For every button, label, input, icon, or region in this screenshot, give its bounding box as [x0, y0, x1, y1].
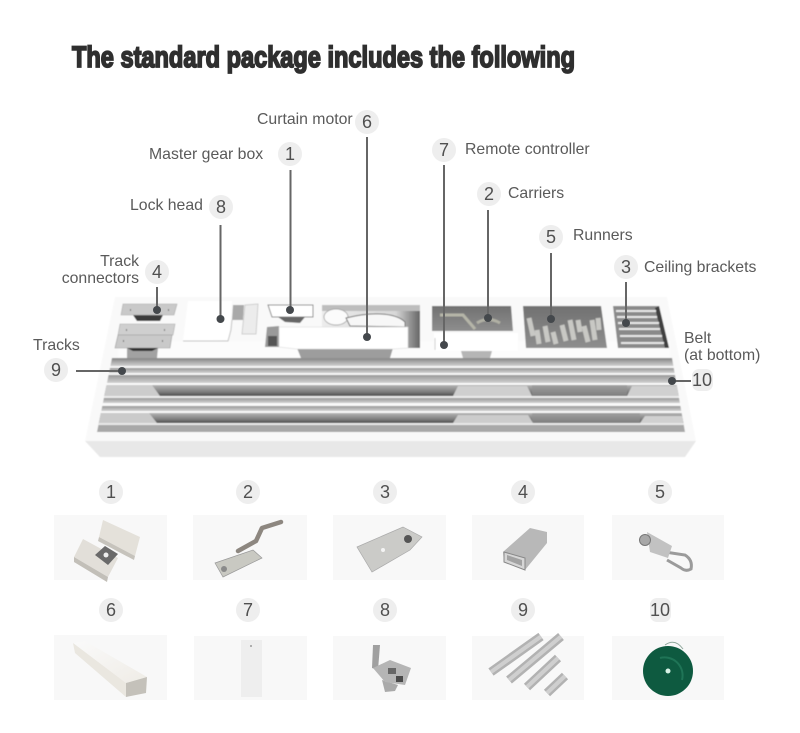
item: tracks [90, 357, 690, 432]
item: master gear box [265, 305, 313, 347]
callout 3: ceiling brackets: Ceiling brackets [644, 259, 756, 276]
part 3: ceiling bracket: 3 [380, 482, 390, 502]
callout 4: track connectors: Track [100, 253, 139, 270]
callout 2: carriers: 2 [484, 184, 494, 204]
title: The standard package includes the following [72, 41, 575, 74]
callout 1: master gear box [149, 142, 302, 314]
part 5: runner: 5 [655, 482, 665, 502]
callout 10: belt: 10 [692, 370, 712, 390]
white inner area [118, 341, 670, 358]
callout 2: carriers [477, 182, 564, 322]
part 10: belt [612, 598, 724, 700]
part 1: master gear box: 1 [106, 482, 116, 502]
callout 10: belt: (at bottom) [684, 347, 760, 364]
callout 9: tracks: Tracks [33, 337, 80, 354]
parts grid [54, 480, 724, 700]
part 8: lock head: 8 [380, 600, 390, 620]
callout 9: tracks: 9 [51, 360, 61, 380]
callout 5: runners: 5 [546, 227, 556, 247]
callout 9: tracks [33, 337, 126, 382]
part 2: carrier [193, 480, 307, 580]
callout 8: lock head: 8 [216, 197, 226, 217]
tray front face [85, 441, 696, 457]
callout 5: runners [539, 225, 633, 323]
callout 4: track connectors: 4 [152, 262, 162, 282]
callout 1: master gear box: 1 [285, 144, 295, 164]
item: runners tray [523, 306, 607, 348]
callout 6: curtain motor [257, 110, 379, 341]
part 6: curtain motor: 6 [106, 600, 116, 620]
item: motor block [279, 327, 408, 358]
callout 7: remote controller [432, 138, 590, 349]
part 4: track connector [472, 480, 584, 580]
item: track connectors [115, 304, 177, 358]
item: ceiling brackets tray [613, 306, 669, 348]
callout 8: lock head [130, 195, 233, 323]
callout 3: ceiling brackets: 3 [621, 257, 631, 277]
item: motor compartment [322, 305, 420, 348]
part 7: remote controller [194, 598, 307, 700]
part 4: track connector: 4 [518, 482, 528, 502]
callout 6: curtain motor: Curtain motor [257, 111, 353, 128]
part 9: tracks: 9 [518, 600, 528, 620]
part 10: belt: 10 [650, 600, 670, 620]
callout 1: master gear box: Master gear box [149, 146, 263, 163]
part 8: lock head [333, 598, 446, 700]
part 6: curtain motor [54, 598, 167, 700]
part 5: runner [612, 480, 724, 580]
item: carriers tray [432, 306, 513, 331]
callout 7: remote controller: Remote controller [465, 141, 590, 158]
part 9: tracks [472, 598, 584, 700]
callout 4: track connectors: connectors [62, 270, 139, 287]
callout 6: curtain motor: 6 [362, 112, 372, 132]
callout 10: belt [668, 330, 760, 391]
item: remote white area [434, 333, 518, 358]
callout 5: runners: Runners [573, 227, 633, 244]
panel: package tray [85, 297, 696, 457]
tray top surface [85, 297, 696, 441]
part 2: carrier: 2 [243, 482, 253, 502]
part 3: ceiling bracket [333, 480, 446, 580]
callout 7: remote controller: 7 [439, 140, 449, 160]
item: lock head compartment [183, 301, 258, 341]
callout 8: lock head: Lock head [130, 197, 203, 214]
callout 10: belt: Belt [684, 330, 712, 347]
part 1: master gear box [54, 480, 167, 582]
callout 4: track connectors [62, 253, 169, 314]
callout 2: carriers: Carriers [508, 185, 564, 202]
part 7: remote controller: 7 [243, 600, 253, 620]
callout 3: ceiling brackets [614, 255, 756, 327]
